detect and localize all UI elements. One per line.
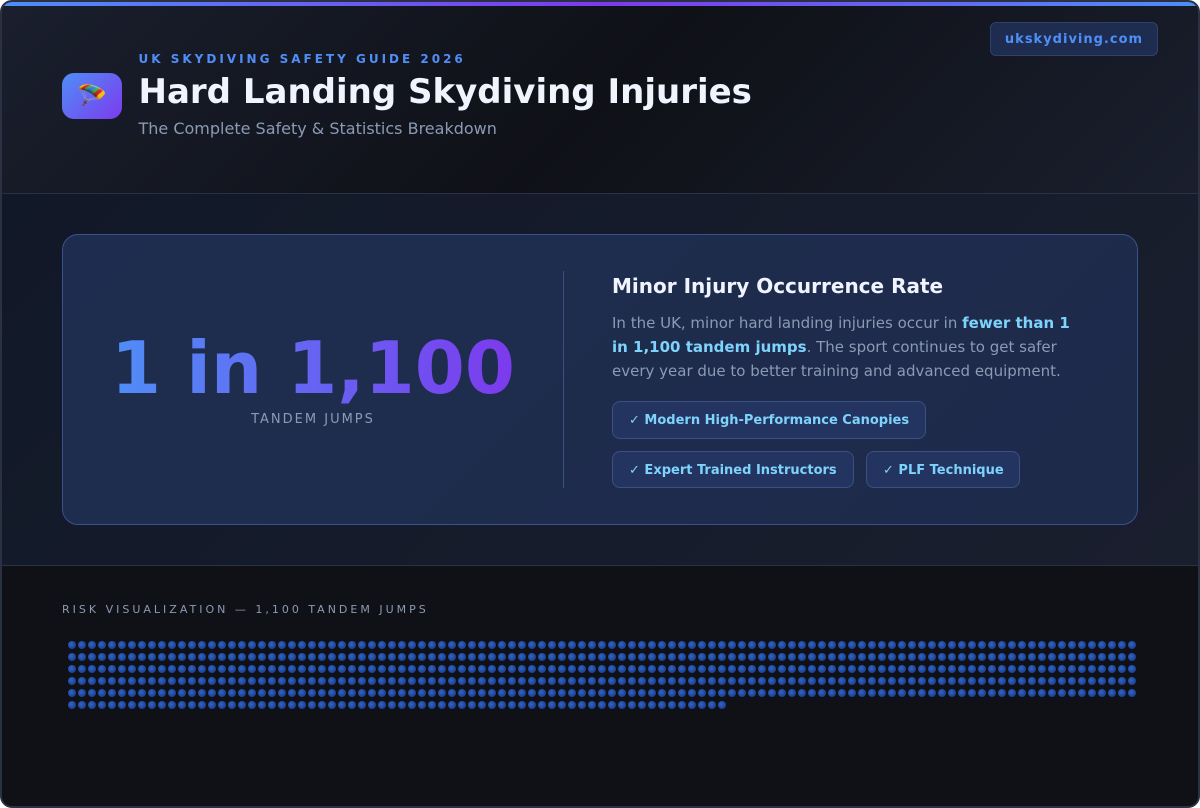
- panel: risk visualization band: [0, 565, 1200, 808]
- card description: In the UK, minor hard landing injuries occur in fewer than 1 in 1,100 tandem jumps. The sport continues to get safer every year due to better training and advanced equipment.: [612, 314, 1070, 380]
- big statistic: 1 in 1,100: [111, 326, 515, 410]
- card heading: Minor Injury Occurrence Rate: [612, 274, 943, 298]
- website badge: [990, 22, 1158, 56]
- icon: parachute: 🪂: [77, 82, 107, 110]
- dot grid: tandem jumps: [68, 641, 1136, 709]
- website badge: ukskydiving.com: [1005, 32, 1143, 47]
- statistic label: TANDEM JUMPS: [251, 412, 375, 427]
- eyebrow heading: UK SKYDIVING SAFETY GUIDE 2026: [138, 52, 466, 66]
- subtitle: The Complete Safety & Statistics Breakdown: [138, 119, 497, 138]
- tag: canopies: ✓ Modern High-Performance Canopies: [629, 413, 909, 428]
- top accent bar: [0, 0, 1200, 6]
- tag: PLF technique: [866, 451, 1020, 488]
- title: Hard Landing Skydiving Injuries: [138, 72, 752, 112]
- tag: instructors: ✓ Expert Trained Instructors: [629, 463, 837, 478]
- tag: canopies: [612, 401, 926, 439]
- tag: PLF technique: ✓ PLF Technique: [883, 463, 1004, 478]
- tag: instructors: [612, 451, 854, 488]
- risk visualization heading: RISK VISUALIZATION — 1,100 TANDEM JUMPS: [62, 603, 429, 616]
- panel: key statistic band: [0, 194, 1200, 565]
- panel: statistic card: [62, 234, 1138, 525]
- icon: parachute: [62, 73, 122, 119]
- panel: header: [0, 6, 1200, 194]
